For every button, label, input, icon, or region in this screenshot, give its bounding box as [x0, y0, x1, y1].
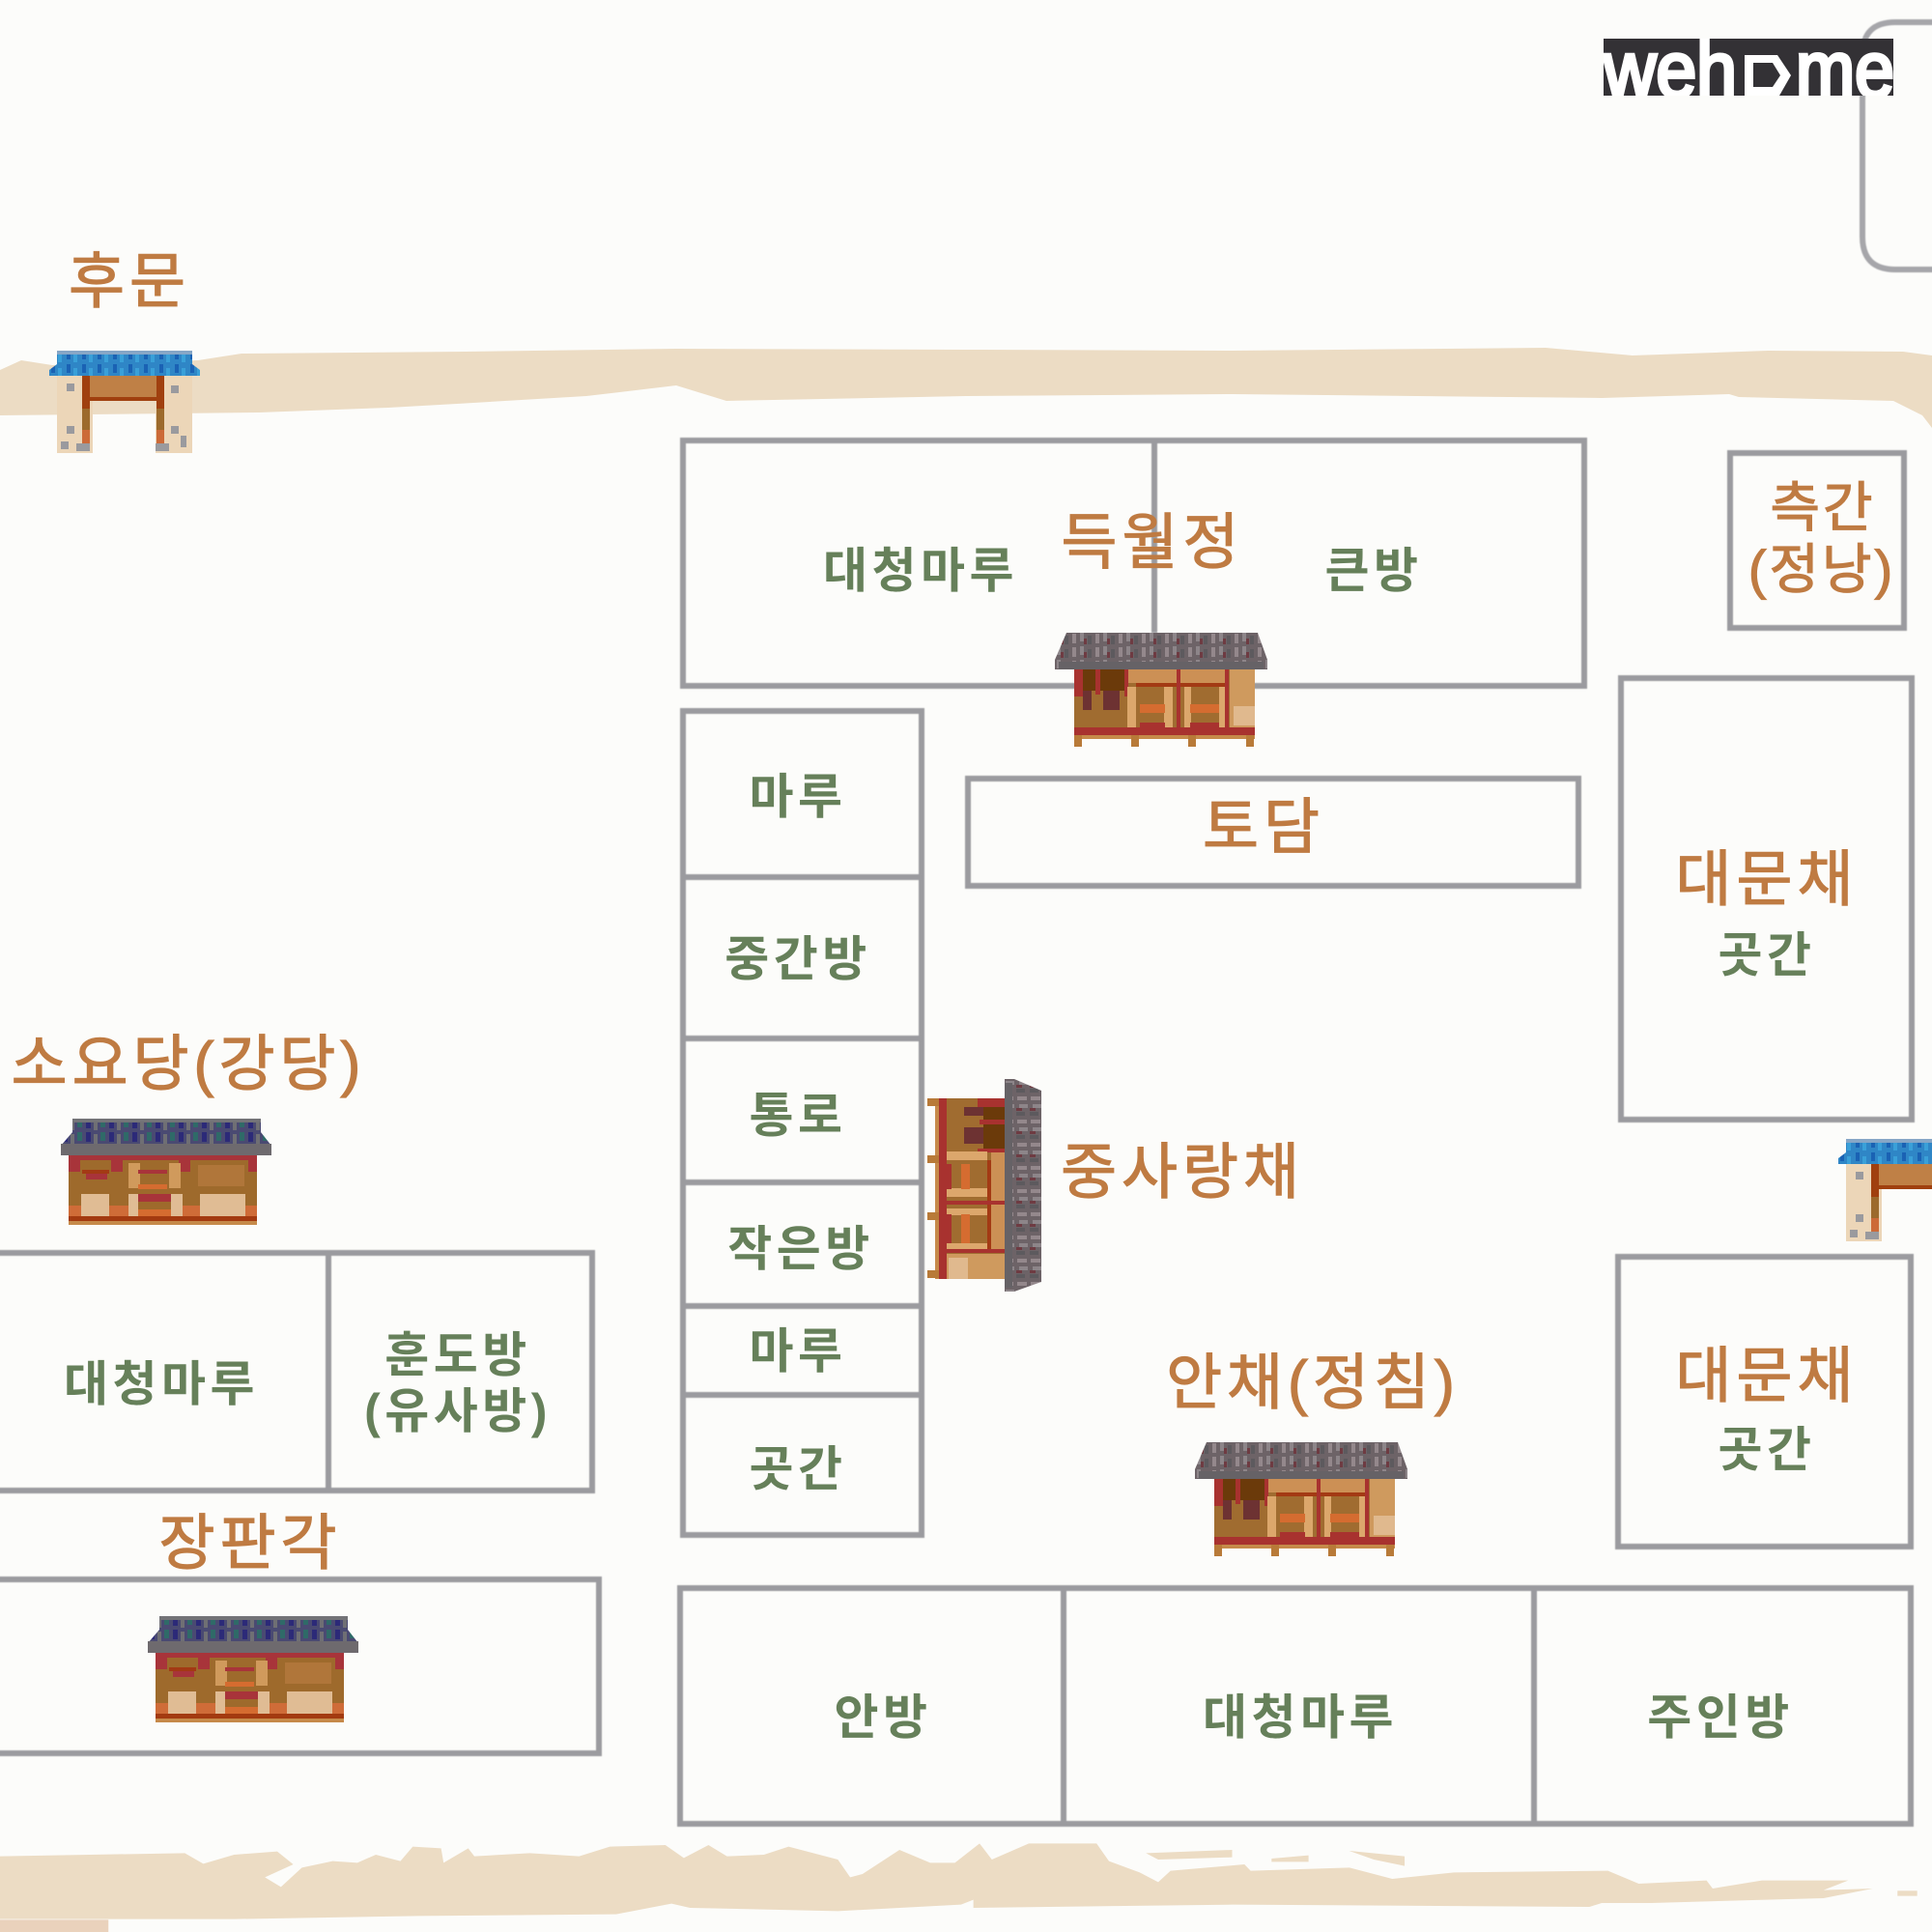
room: 토담: [968, 779, 1578, 886]
label: 후문: 후문: [69, 248, 190, 316]
rooms: 소요당: 훈도방: [384, 1328, 531, 1382]
brush stroke: bottom: [0, 1843, 1918, 1932]
rooms: 소요당: 대청마루: [64, 1357, 259, 1411]
logo: wehome: me: [1796, 26, 1894, 114]
room: 측간: [1730, 453, 1904, 628]
frame: 장판각: [0, 1579, 599, 1753]
column: 중사랑채 rooms: 중간방: [724, 932, 871, 986]
brush stroke: top: [0, 348, 1932, 428]
label: 소요당(강당): 소요당(강당): [12, 1031, 365, 1098]
label: 중사랑채: 중사랑채: [1061, 1139, 1304, 1207]
label: 장판각: 장판각: [159, 1510, 341, 1577]
room: 대문채 upper: 곳간: [1718, 928, 1816, 982]
rooms: 소요당: (유사방): [364, 1384, 552, 1438]
column: 중사랑채 rooms: 통로: [750, 1089, 846, 1143]
icon: 장판각 house: [148, 1616, 358, 1722]
column: 중사랑채 rooms: 마루: [750, 1324, 846, 1378]
logo: wehome: [1604, 39, 1893, 96]
rooms: 소요당: [0, 1253, 592, 1491]
logo: wehome: weh: [1603, 26, 1737, 114]
rooms: 안채: 주인방: [1647, 1690, 1794, 1745]
room: 대문채 lower: [1618, 1257, 1911, 1547]
label: 득월정: 득월정: [1062, 509, 1243, 577]
room: 대문채 lower: 곳간: [1718, 1423, 1816, 1477]
column: 중사랑채 rooms: 마루: [750, 770, 846, 824]
icon: 소요당 house: [61, 1119, 271, 1225]
room: 대문채 upper: [1621, 678, 1912, 1120]
room: 측간: 측간: [1770, 477, 1876, 538]
icon: 중사랑채 house: [927, 1079, 1041, 1292]
rooms: 안채: 대청마루: [1203, 1690, 1398, 1745]
room: 토담: 토담: [1203, 794, 1324, 862]
label: 안채(정침): 안채(정침): [1166, 1350, 1460, 1417]
rounded frame at top right: [1862, 22, 1932, 270]
icon: 안채 house: [1195, 1442, 1407, 1556]
building: 득월정 rooms: [683, 440, 1584, 686]
building: 득월정 rooms: 대청마루: [823, 544, 1018, 598]
rooms: 안채: 안방: [835, 1690, 931, 1745]
room: 대문채 lower: 대문채: [1676, 1343, 1858, 1410]
column: 중사랑채 rooms: 곳간: [750, 1442, 846, 1496]
icon: main gate: [1838, 1139, 1932, 1241]
column: 중사랑채 rooms: [683, 711, 922, 1535]
room: 대문채 upper: 대문채: [1676, 846, 1858, 914]
column: 중사랑채 rooms: 작은방: [727, 1222, 874, 1276]
building: 득월정 rooms: 큰방: [1325, 544, 1422, 598]
room: 측간: (정낭): [1748, 539, 1895, 600]
icon: back gate: [49, 351, 200, 453]
rooms: 안채: [680, 1588, 1911, 1824]
icon: 득월정 house: [1055, 633, 1267, 747]
